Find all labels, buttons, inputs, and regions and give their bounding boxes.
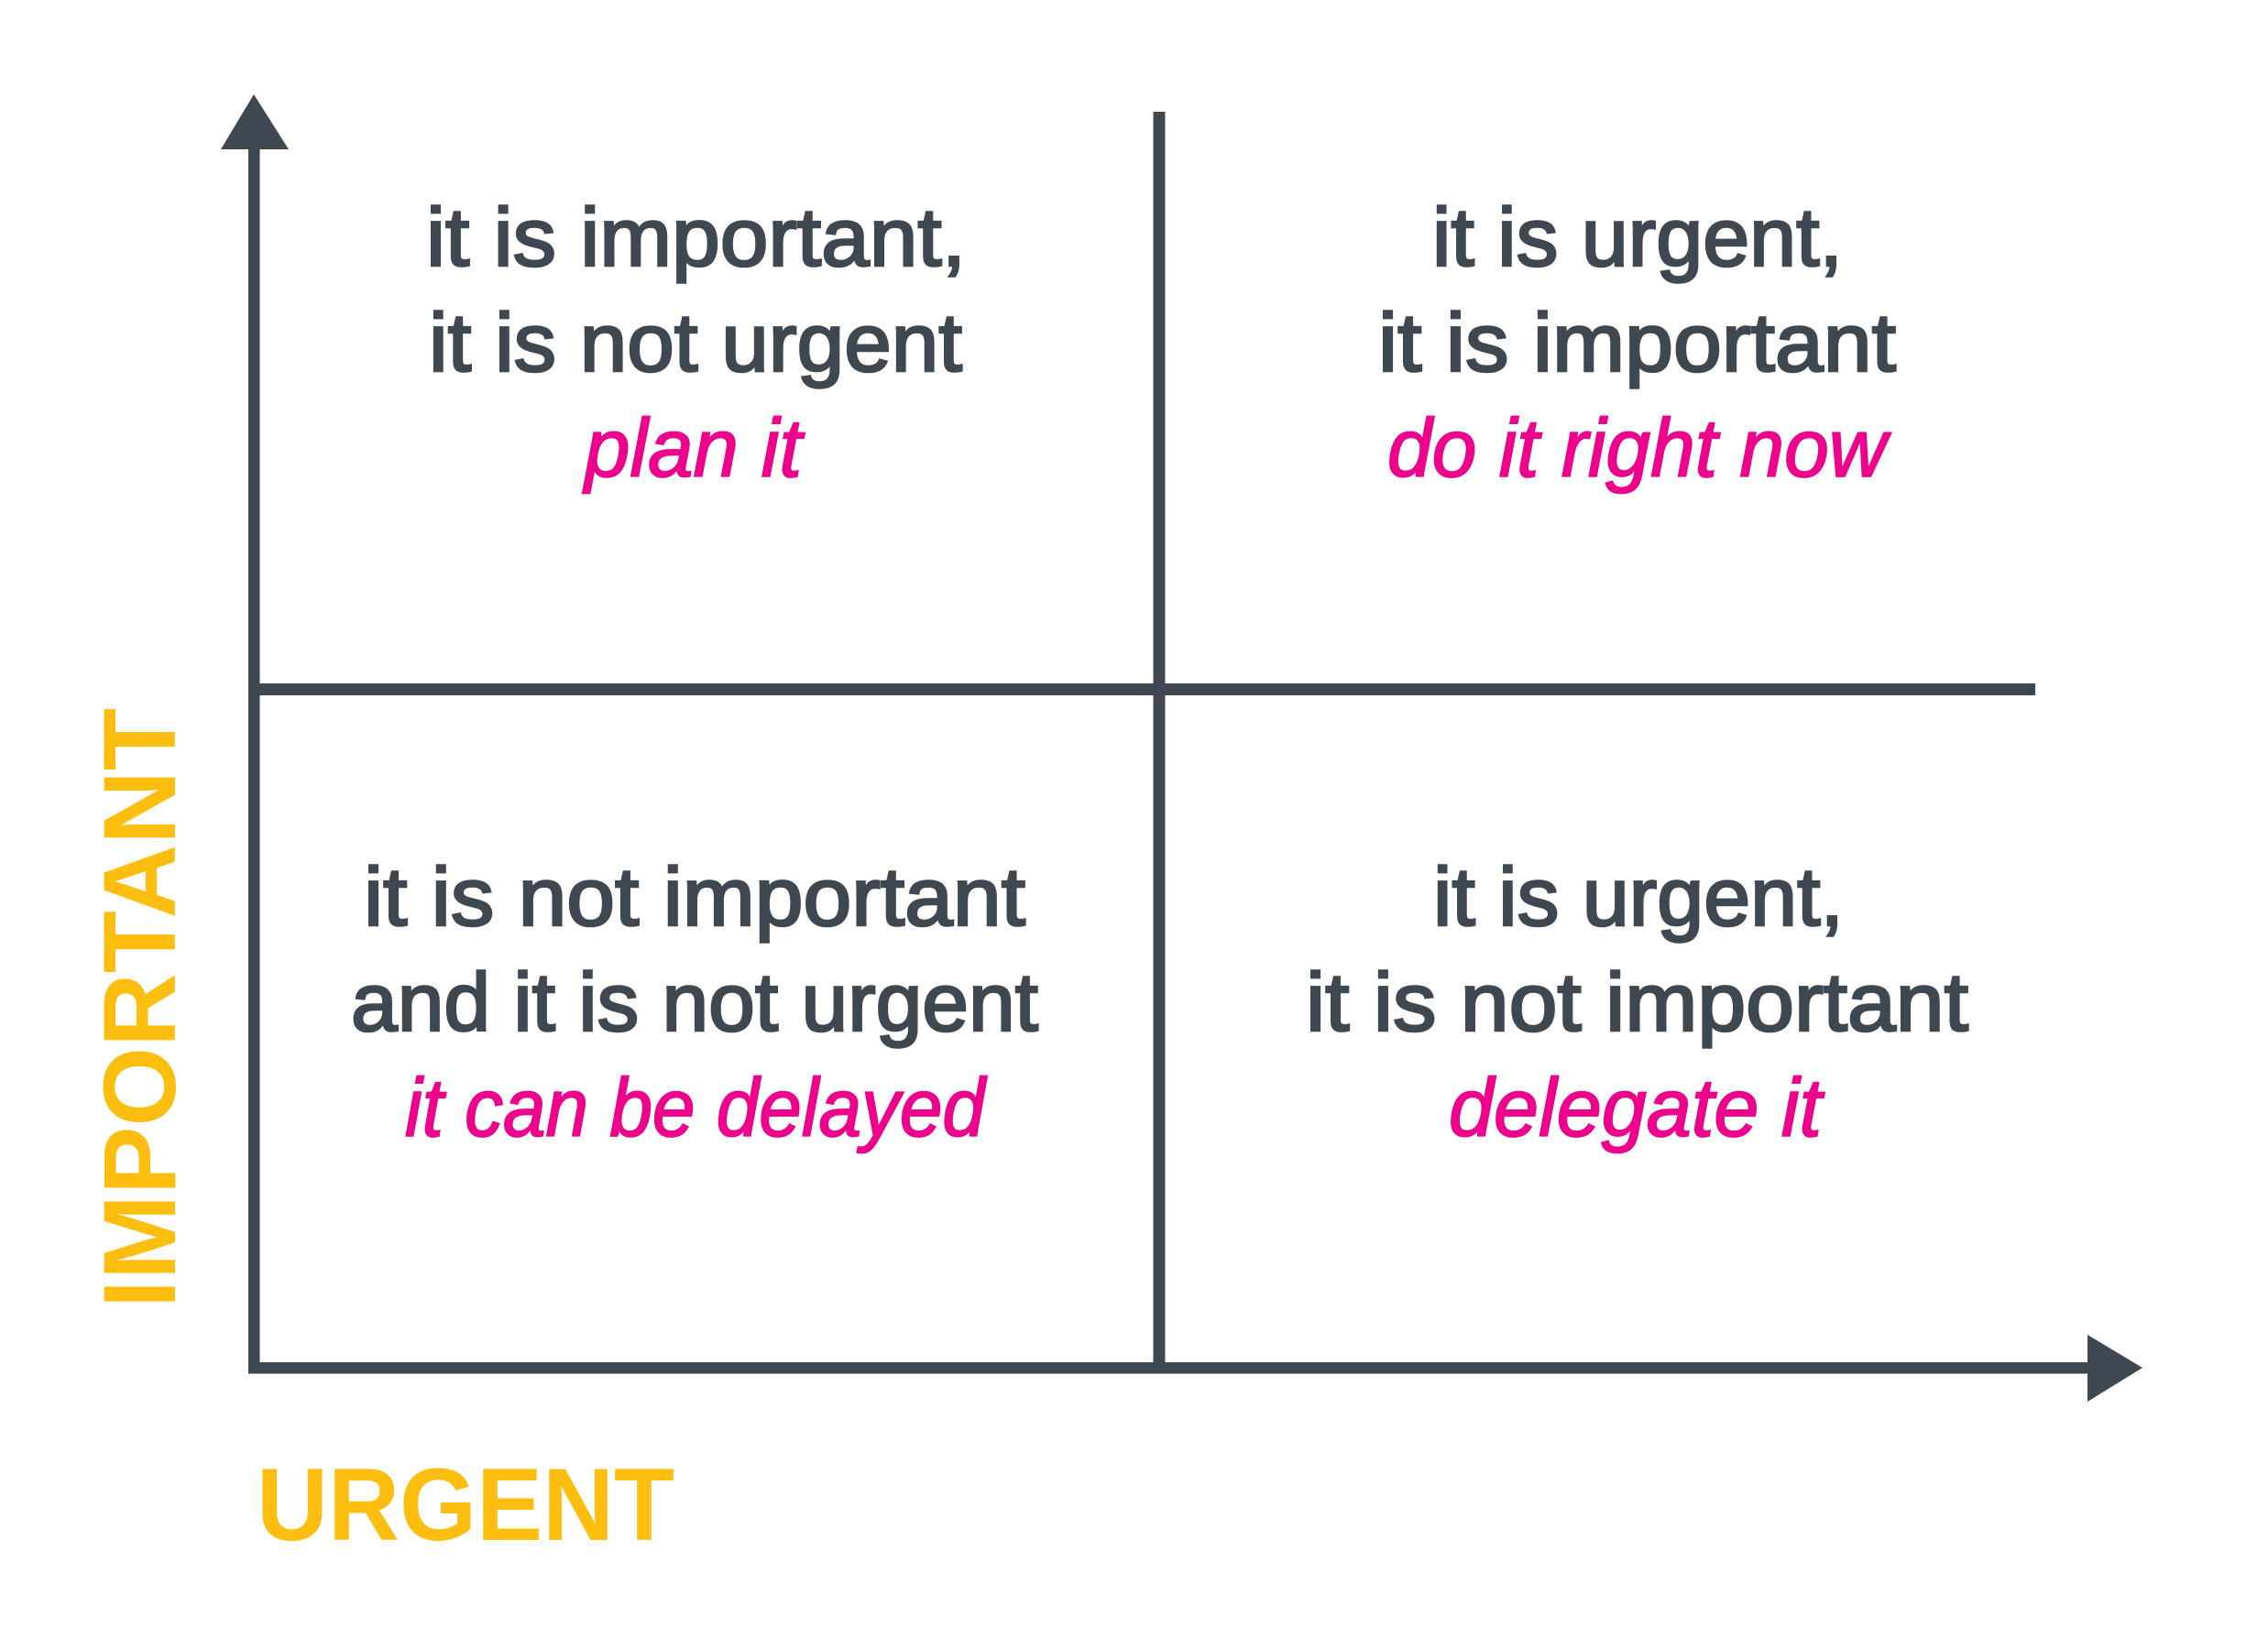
vertical quadrant divider <box>1153 112 1166 1373</box>
horizontal axis arrow: urgent <box>248 1335 2142 1402</box>
text: it is not important and it is not urgent: and it is not urgent <box>351 957 1038 1049</box>
text: it is not important and it is not urgent: it is not important <box>364 852 1025 944</box>
action: delegate it: delegate it <box>1449 1063 1825 1154</box>
quadrant: bottom left <box>351 852 1038 1154</box>
text: it is urgent, it is important: it is important <box>1378 298 1896 389</box>
quadrant: bottom right <box>1306 852 1968 1154</box>
text: it is urgent, it is not important: it is not important <box>1306 957 1968 1049</box>
action: plan it: plan it <box>582 403 805 495</box>
text: it is urgent, it is important: it is urgent, <box>1432 192 1843 284</box>
y axis label: IMPORTANT: IMPORTANT <box>82 708 197 1308</box>
action: do it right now: do it right now <box>1387 403 1891 495</box>
text: it is important, it is not urgent: it is important, <box>426 192 966 284</box>
text: it is not important and it is not urgent <box>351 852 1038 1049</box>
x axis label: URGENT: URGENT <box>257 1447 674 1562</box>
text: it is important, it is not urgent: it is not urgent <box>429 298 962 389</box>
vertical axis arrow: important <box>221 94 289 1374</box>
quadrant: top left <box>426 192 966 495</box>
horizontal quadrant divider <box>259 683 2035 695</box>
action: it can be delayed: it can be delayed <box>405 1063 988 1154</box>
text: it is urgent, it is important <box>1378 192 1896 389</box>
text: it is important, it is not urgent <box>426 192 966 389</box>
quadrant: top right <box>1378 192 1896 495</box>
text: it is urgent, it is not important <box>1306 852 1968 1049</box>
text: it is urgent, it is not important: it is urgent, <box>1433 852 1844 944</box>
